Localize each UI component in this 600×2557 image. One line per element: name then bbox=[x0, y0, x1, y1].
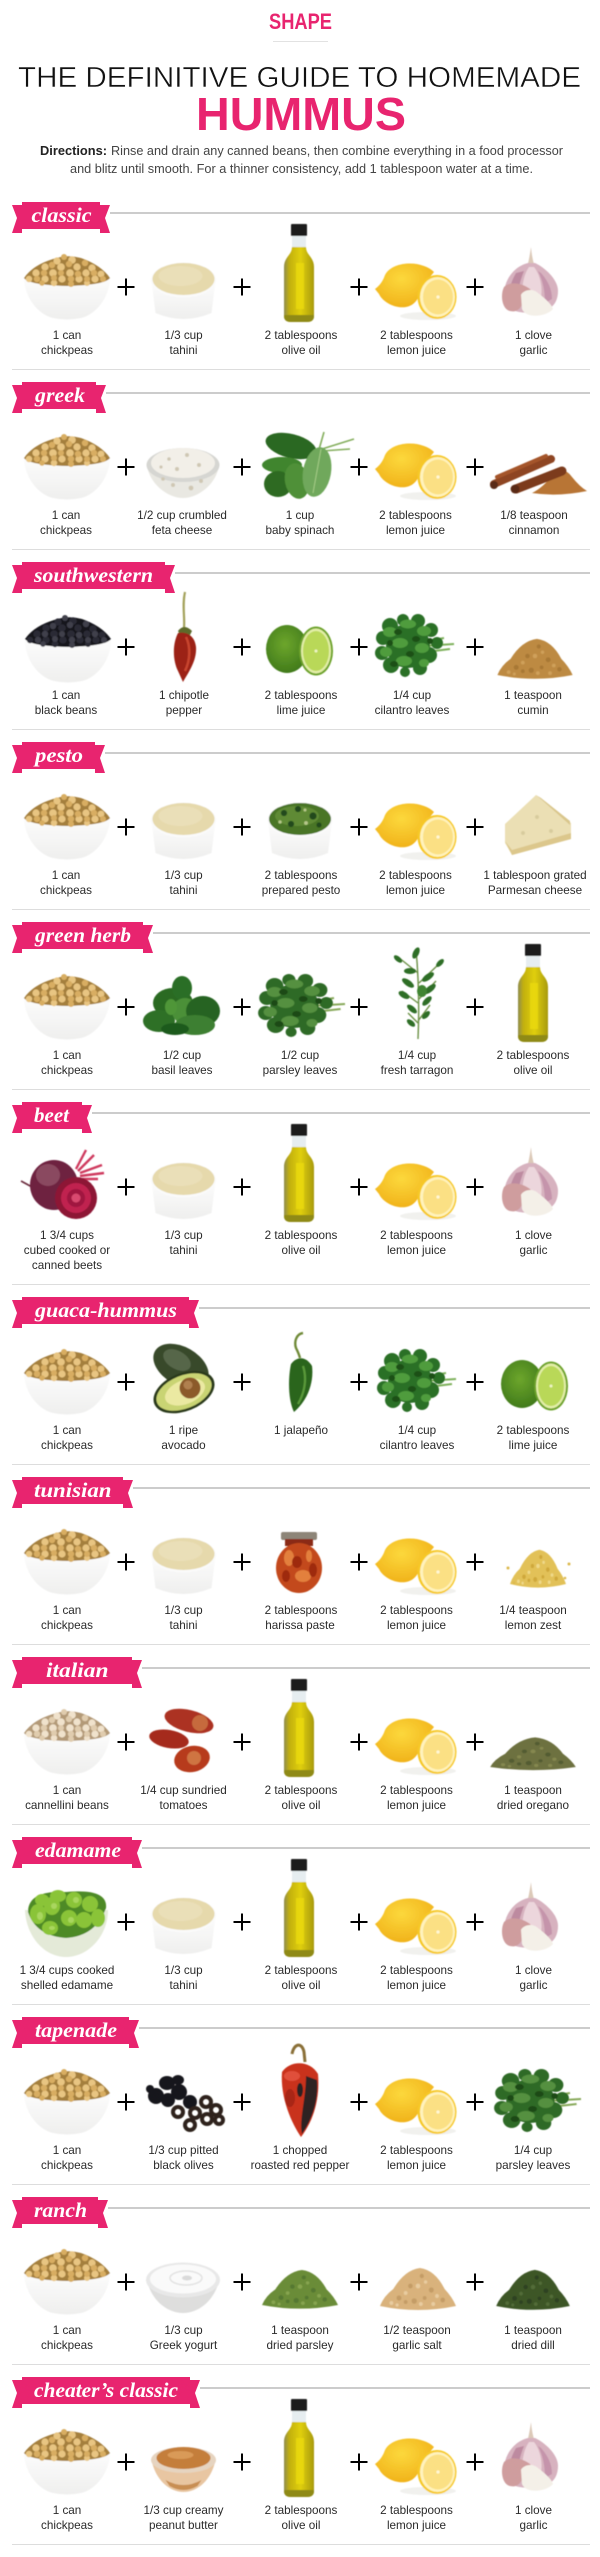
icon: olive oil bbox=[518, 944, 548, 1042]
label: lime juice: lime juice bbox=[509, 1439, 557, 1452]
icon: cannellini beans bbox=[24, 1709, 110, 1774]
label: avocado: 1 ripe bbox=[169, 1424, 198, 1437]
icon: dried parsley bbox=[262, 2270, 338, 2309]
icon: black beans bbox=[25, 615, 111, 682]
icon: cinnamon bbox=[490, 456, 587, 495]
plus bbox=[350, 818, 368, 836]
icon: lemon bbox=[375, 803, 456, 860]
icon: tarragon bbox=[393, 946, 445, 1039]
plus bbox=[466, 2274, 484, 2290]
label: chickpeas: chickpeas bbox=[41, 2519, 93, 2532]
panel: italian bbox=[12, 1657, 590, 1825]
label: tahini: tahini bbox=[170, 1979, 197, 1992]
ribbon heading: pesto: pesto bbox=[33, 743, 83, 767]
label: cilantro: 1/4 cup bbox=[398, 1424, 437, 1437]
panel: southwestern bbox=[12, 562, 590, 730]
label: dried parsley: dried parsley bbox=[267, 2339, 334, 2352]
label: feta: 1/2 cup crumbled bbox=[137, 509, 227, 522]
icon: tahini bbox=[151, 1162, 216, 1219]
plus bbox=[466, 1914, 484, 1930]
plus bbox=[350, 278, 368, 296]
plus bbox=[466, 278, 484, 296]
plus bbox=[350, 2454, 368, 2470]
label: greek yogurt: Greek yogurt bbox=[150, 2339, 218, 2352]
icon: harissa bbox=[276, 1532, 322, 1593]
directions text block: Rinse and drain any canned beans, then combine everything in a food processor bbox=[111, 143, 564, 158]
plus bbox=[118, 278, 134, 296]
icon: chickpeas bbox=[24, 974, 110, 1040]
ribbon heading: tapenade: tapenade bbox=[35, 2018, 117, 2042]
ribbon heading: ranch: ranch bbox=[34, 2198, 87, 2222]
label: olive oil: olive oil bbox=[282, 1979, 320, 1992]
label: tarragon: fresh tarragon bbox=[381, 1064, 453, 1077]
plus bbox=[234, 2274, 250, 2290]
label: chickpeas: 1 can bbox=[52, 869, 80, 882]
icon: parmesan bbox=[505, 795, 571, 855]
icon: garlic salt bbox=[380, 2268, 456, 2310]
panel: tunisian bbox=[12, 1477, 590, 1645]
plus bbox=[234, 638, 250, 656]
label: chickpeas: 1 can bbox=[53, 1424, 81, 1437]
ribbon heading: green herb bbox=[12, 922, 153, 953]
label: peanut butter: 1/3 cup creamy bbox=[144, 2504, 224, 2517]
icon: lemon bbox=[375, 1163, 456, 1220]
ribbon heading: greek bbox=[12, 382, 106, 413]
label: chickpeas: 1 can bbox=[52, 509, 80, 522]
brand logo: SHAPE: SHAPE bbox=[269, 9, 332, 34]
plus bbox=[466, 1178, 484, 1196]
ribbon heading: edamame bbox=[12, 1837, 142, 1868]
label: chickpeas: chickpeas bbox=[40, 884, 92, 897]
icon: chickpeas bbox=[24, 434, 110, 500]
label: garlic: garlic bbox=[520, 344, 548, 357]
label: edamame: 1 3/4 cups cooked bbox=[20, 1964, 114, 1977]
label: garlic salt: garlic salt bbox=[392, 2339, 442, 2352]
label: black beans: 1 can bbox=[52, 689, 80, 702]
icon: tahini bbox=[151, 802, 216, 859]
label: olive oil: 2 tablespoons bbox=[265, 1229, 338, 1242]
label: parsley: parsley leaves bbox=[496, 2159, 571, 2172]
plus bbox=[118, 998, 134, 1016]
plus bbox=[350, 1734, 368, 1750]
icon: olive oil bbox=[284, 1124, 314, 1222]
label: garlic: 1 clove bbox=[515, 329, 552, 342]
plus bbox=[234, 1374, 250, 1390]
icon: garlic bbox=[502, 1882, 558, 1951]
icon: lemon bbox=[375, 443, 456, 500]
icon: roasted red pepper bbox=[282, 2045, 318, 2137]
label: lemon juice: lemon juice bbox=[386, 524, 445, 537]
plus bbox=[234, 1734, 250, 1750]
label: chickpeas: 1 can bbox=[53, 2144, 81, 2157]
label: parmesan: 1 tablespoon grated bbox=[483, 869, 587, 882]
directions text block: and blitz until smooth. For a thinner consistency, add 1 tablespoon water at a time. bbox=[70, 161, 533, 176]
label: lemon juice: lemon juice bbox=[387, 2159, 446, 2172]
label: cinnamon: 1/8 teaspoon bbox=[500, 509, 568, 522]
label: olive oil: olive oil bbox=[514, 1064, 552, 1077]
ribbon heading: cheater's classic bbox=[12, 2377, 200, 2408]
panel: edamame bbox=[12, 1837, 590, 2005]
panel: classic bbox=[12, 202, 590, 370]
heading: HUMMUS: HUMMUS bbox=[196, 88, 406, 140]
label: pesto: prepared pesto bbox=[262, 884, 341, 897]
icon: basil bbox=[143, 976, 220, 1035]
label: tahini: tahini bbox=[170, 884, 197, 897]
icon: pesto bbox=[268, 802, 332, 859]
label: lemon juice: 2 tablespoons bbox=[380, 1229, 453, 1242]
plus bbox=[466, 2454, 484, 2470]
label: dried dill: 1 teaspoon bbox=[504, 2324, 562, 2337]
label: pesto: 2 tablespoons bbox=[265, 869, 338, 882]
label: black olives: black olives bbox=[153, 2159, 214, 2172]
icon: olive oil bbox=[284, 2399, 314, 2497]
label: chickpeas: 1 can bbox=[53, 1604, 81, 1617]
icon: parsley bbox=[494, 2069, 581, 2132]
icon: lemon bbox=[375, 2438, 456, 2495]
label: olive oil: olive oil bbox=[282, 344, 320, 357]
plus bbox=[466, 2094, 484, 2110]
plus bbox=[350, 458, 368, 476]
label: olive oil: 2 tablespoons bbox=[265, 2504, 338, 2517]
plus bbox=[466, 818, 484, 836]
icon: chickpeas bbox=[24, 254, 110, 320]
directions text block: Directions: bbox=[40, 143, 107, 158]
label: garlic salt: 1/2 teaspoon bbox=[383, 2324, 451, 2337]
label: lime juice: lime juice bbox=[277, 704, 325, 717]
label: cannellini beans: cannellini beans bbox=[25, 1799, 109, 1812]
icon: lemon bbox=[375, 2078, 456, 2135]
label: garlic: 1 clove bbox=[515, 1229, 552, 1242]
label: lemon juice: 2 tablespoons bbox=[380, 1784, 453, 1797]
label: lemon juice: lemon juice bbox=[387, 344, 446, 357]
label: parsley: 1/4 cup bbox=[514, 2144, 553, 2157]
label: cumin: 1 teaspoon bbox=[504, 689, 562, 702]
plus bbox=[234, 458, 250, 476]
panel: tapenade bbox=[12, 2017, 590, 2185]
label: beets: canned beets bbox=[32, 1259, 102, 1272]
label: lemon juice: 2 tablespoons bbox=[380, 1604, 453, 1617]
ribbon heading: italian bbox=[12, 1657, 142, 1688]
plus bbox=[466, 1734, 484, 1750]
label: dried dill: dried dill bbox=[511, 2339, 555, 2352]
ribbon heading: ranch bbox=[12, 2197, 108, 2228]
ribbon heading: beet: beet bbox=[34, 1103, 70, 1127]
plus bbox=[234, 818, 250, 836]
plus bbox=[234, 1178, 250, 1196]
plus bbox=[118, 818, 134, 836]
plus bbox=[350, 2274, 368, 2290]
label: cinnamon: cinnamon bbox=[509, 524, 559, 537]
label: chickpeas: chickpeas bbox=[40, 524, 92, 537]
label: cilantro: cilantro leaves bbox=[380, 1439, 455, 1452]
label: lemon zest: lemon zest bbox=[505, 1619, 562, 1632]
label: roasted red pepper: roasted red pepper bbox=[251, 2159, 349, 2172]
icon: tahini bbox=[151, 262, 216, 319]
label: avocado: avocado bbox=[161, 1439, 206, 1452]
ribbon heading: guaca-hummus: guaca-hummus bbox=[34, 1298, 177, 1322]
plus bbox=[234, 1554, 250, 1570]
icon: chickpeas bbox=[24, 2429, 110, 2494]
ribbon heading: green herb: green herb bbox=[34, 923, 131, 947]
icon: lemon zest bbox=[506, 1550, 570, 1588]
label: chickpeas: chickpeas bbox=[41, 1439, 93, 1452]
label: tahini: tahini bbox=[170, 1244, 197, 1257]
label: olive oil: 2 tablespoons bbox=[265, 329, 338, 342]
plus bbox=[118, 2094, 134, 2110]
label: spinach: 1 cup bbox=[286, 509, 315, 522]
label: sundried tomatoes: tomatoes bbox=[159, 1799, 208, 1812]
label: chipotle: pepper bbox=[166, 704, 202, 717]
label: lemon juice: lemon juice bbox=[387, 2519, 446, 2532]
icon: spinach bbox=[262, 428, 354, 501]
icon: olive oil bbox=[284, 1679, 314, 1777]
label: harissa: harissa paste bbox=[265, 1619, 335, 1632]
label: tahini: tahini bbox=[170, 344, 197, 357]
plus bbox=[466, 458, 484, 476]
label: tahini: tahini bbox=[170, 1619, 197, 1632]
label: parsley: parsley leaves bbox=[263, 1064, 338, 1077]
icon: chickpeas bbox=[24, 2069, 110, 2134]
plus bbox=[118, 1178, 134, 1196]
label: garlic: 1 clove bbox=[515, 2504, 552, 2517]
label: basil: basil leaves bbox=[151, 1064, 213, 1077]
plus bbox=[234, 278, 250, 296]
label: olive oil: olive oil bbox=[282, 1244, 320, 1257]
icon: edamame bbox=[25, 1890, 108, 1957]
plus bbox=[118, 1374, 134, 1390]
label: black beans: black beans bbox=[35, 704, 97, 717]
label: beets: cubed cooked or bbox=[24, 1244, 110, 1257]
icon: lime bbox=[266, 625, 333, 676]
plus bbox=[118, 2274, 134, 2290]
label: cilantro: 1/4 cup bbox=[393, 689, 432, 702]
label: olive oil: olive oil bbox=[282, 1799, 320, 1812]
icon: parsley bbox=[258, 974, 345, 1037]
panel: greek bbox=[12, 382, 590, 550]
plus bbox=[118, 1914, 134, 1930]
icon: lemon bbox=[375, 1898, 456, 1955]
plus bbox=[350, 1178, 368, 1196]
label: spinach: baby spinach bbox=[266, 524, 334, 537]
label: lemon juice: 2 tablespoons bbox=[380, 329, 453, 342]
plus bbox=[466, 998, 484, 1016]
icon: black olives bbox=[146, 2075, 223, 2130]
ribbon heading: southwestern bbox=[12, 562, 175, 593]
ribbon heading: tunisian: tunisian bbox=[34, 1478, 112, 1502]
label: tarragon: 1/4 cup bbox=[398, 1049, 437, 1062]
plus bbox=[350, 2094, 368, 2110]
icon: peanut butter bbox=[151, 2447, 216, 2492]
label: greek yogurt: 1/3 cup bbox=[164, 2324, 203, 2337]
label: cumin: cumin bbox=[517, 704, 549, 717]
ribbon heading: cheater's classic: cheater’s classic bbox=[34, 2378, 179, 2402]
label: lemon juice: lemon juice bbox=[387, 1244, 446, 1257]
icon: cilantro bbox=[375, 614, 454, 677]
icon: chickpeas bbox=[24, 1529, 110, 1594]
label: edamame: shelled edamame bbox=[21, 1979, 113, 1992]
label: chickpeas: chickpeas bbox=[41, 2159, 93, 2172]
plus bbox=[350, 1374, 368, 1390]
icon: chickpeas bbox=[24, 2249, 110, 2314]
icon: olive oil bbox=[284, 224, 314, 322]
label: tahini: 1/3 cup bbox=[164, 1604, 203, 1617]
label: chickpeas: chickpeas bbox=[41, 1619, 93, 1632]
label: oregano: 1 teaspoon bbox=[504, 1784, 562, 1797]
label: chickpeas: chickpeas bbox=[41, 1064, 93, 1077]
panel: cheater's classic bbox=[12, 2377, 590, 2545]
label: olive oil: olive oil bbox=[282, 2519, 320, 2532]
plus bbox=[118, 458, 134, 476]
plus bbox=[118, 2454, 134, 2470]
label: olive oil: 2 tablespoons bbox=[265, 1964, 338, 1977]
icon: garlic bbox=[502, 2422, 558, 2491]
label: tahini: 1/3 cup bbox=[164, 1964, 203, 1977]
icon: chickpeas bbox=[24, 794, 110, 860]
ribbon heading: italian: italian bbox=[46, 1658, 108, 1682]
icon: avocado bbox=[146, 1335, 221, 1422]
label: lemon juice: lemon juice bbox=[386, 884, 445, 897]
label: cannellini beans: 1 can bbox=[53, 1784, 81, 1797]
plus bbox=[118, 638, 134, 656]
plus bbox=[234, 2094, 250, 2110]
icon: lemon bbox=[375, 1538, 456, 1595]
icon: beet bbox=[21, 1150, 104, 1219]
label: chipotle: 1 chipotle bbox=[159, 689, 209, 702]
label: beets: 1 3/4 cups bbox=[40, 1229, 94, 1242]
plus bbox=[118, 1554, 134, 1570]
label: lemon juice: 2 tablespoons bbox=[379, 509, 452, 522]
ribbon heading: southwestern: southwestern bbox=[33, 563, 153, 587]
label: garlic: 1 clove bbox=[515, 1964, 552, 1977]
plus bbox=[466, 1554, 484, 1570]
label: chickpeas: 1 can bbox=[53, 2324, 81, 2337]
icon: garlic bbox=[502, 247, 558, 316]
label: garlic: garlic bbox=[520, 2519, 548, 2532]
label: chickpeas: 1 can bbox=[53, 1049, 81, 1062]
label: harissa: 2 tablespoons bbox=[265, 1604, 338, 1617]
ribbon heading: pesto bbox=[12, 742, 105, 773]
label: garlic: garlic bbox=[520, 1979, 548, 1992]
label: lemon zest: 1/4 teaspoon bbox=[499, 1604, 567, 1617]
title: THE DEFINITIVE GUIDE TO HOMEMADE bbox=[18, 62, 581, 94]
directions text block bbox=[40, 143, 564, 176]
panel: guaca-hummus bbox=[12, 1297, 590, 1465]
label: tahini: 1/3 cup bbox=[164, 1229, 203, 1242]
icon: cilantro bbox=[377, 1349, 456, 1412]
label: chickpeas: chickpeas bbox=[41, 344, 93, 357]
label: lemon juice: 2 tablespoons bbox=[379, 869, 452, 882]
icon: tahini bbox=[151, 1898, 216, 1954]
label: lemon juice: lemon juice bbox=[387, 1799, 446, 1812]
plus bbox=[350, 638, 368, 656]
plus bbox=[234, 2454, 250, 2470]
ribbon heading: guaca-hummus bbox=[12, 1297, 199, 1328]
label: olive oil: 2 tablespoons bbox=[265, 1784, 338, 1797]
icon: chipotle bbox=[174, 592, 196, 682]
icon: lemon bbox=[375, 263, 456, 320]
label: chickpeas: chickpeas bbox=[41, 2339, 93, 2352]
label: lemon juice: lemon juice bbox=[387, 1619, 446, 1632]
label: feta: feta cheese bbox=[152, 524, 212, 537]
label: olive oil: 2 tablespoons bbox=[497, 1049, 570, 1062]
label: black olives: 1/3 cup pitted bbox=[148, 2144, 219, 2157]
panel: ranch bbox=[12, 2197, 590, 2365]
plus bbox=[234, 1914, 250, 1930]
ribbon heading: classic bbox=[12, 202, 110, 233]
plus bbox=[466, 1374, 484, 1390]
plus bbox=[118, 1734, 134, 1750]
label: lemon juice: 2 tablespoons bbox=[380, 1964, 453, 1977]
icon: garlic bbox=[502, 1147, 558, 1216]
icon: feta bbox=[146, 448, 220, 498]
label: basil: 1/2 cup bbox=[163, 1049, 202, 1062]
plus bbox=[350, 998, 368, 1016]
plus bbox=[466, 638, 484, 656]
label: jalapeno: 1 jalapeño bbox=[274, 1424, 328, 1437]
icon: greek yogurt bbox=[146, 2262, 220, 2313]
ribbon heading: tunisian bbox=[12, 1477, 133, 1508]
icon: chickpeas bbox=[24, 1349, 110, 1414]
ribbon heading: beet bbox=[12, 1102, 92, 1133]
label: garlic: garlic bbox=[520, 1244, 548, 1257]
plus bbox=[350, 1914, 368, 1930]
label: chickpeas: 1 can bbox=[53, 329, 81, 342]
icon: oregano bbox=[490, 1737, 576, 1770]
ribbon heading: classic: classic bbox=[32, 203, 92, 227]
icon: dried dill bbox=[496, 2270, 570, 2310]
icon: lemon bbox=[375, 1718, 456, 1775]
label: lime juice: 2 tablespoons bbox=[265, 689, 338, 702]
ribbon heading: tapenade bbox=[12, 2017, 139, 2048]
label: oregano: dried oregano bbox=[497, 1799, 570, 1812]
label: dried parsley: 1 teaspoon bbox=[271, 2324, 329, 2337]
panel: pesto bbox=[12, 742, 590, 910]
label: tahini: 1/3 cup bbox=[164, 869, 203, 882]
label: parmesan: Parmesan cheese bbox=[488, 884, 582, 897]
label: tahini: 1/3 cup bbox=[164, 329, 203, 342]
plus bbox=[350, 1554, 368, 1570]
label: lemon juice: lemon juice bbox=[387, 1979, 446, 1992]
icon: tahini bbox=[151, 1538, 216, 1594]
label: parsley: 1/2 cup bbox=[281, 1049, 320, 1062]
label: roasted red pepper: 1 chopped bbox=[273, 2144, 327, 2157]
panel: green herb bbox=[12, 922, 590, 1090]
label: chickpeas: 1 can bbox=[53, 2504, 81, 2517]
icon: cumin bbox=[497, 639, 573, 679]
label: peanut butter: peanut butter bbox=[149, 2519, 218, 2532]
label: sundried tomatoes: 1/4 cup sundried bbox=[140, 1784, 227, 1797]
icon: lime bbox=[501, 1360, 568, 1410]
icon: jalapeno bbox=[289, 1333, 312, 1412]
panel: beet bbox=[12, 1102, 590, 1285]
label: lemon juice: 2 tablespoons bbox=[380, 2144, 453, 2157]
icon: olive oil bbox=[284, 1859, 314, 1957]
plus bbox=[234, 998, 250, 1016]
ribbon heading: edamame: edamame bbox=[35, 1838, 121, 1862]
label: cilantro: cilantro leaves bbox=[375, 704, 450, 717]
label: lime juice: 2 tablespoons bbox=[497, 1424, 570, 1437]
label: lemon juice: 2 tablespoons bbox=[380, 2504, 453, 2517]
ribbon heading: greek: greek bbox=[34, 383, 86, 407]
icon: sundried tomatoes bbox=[148, 1704, 216, 1775]
